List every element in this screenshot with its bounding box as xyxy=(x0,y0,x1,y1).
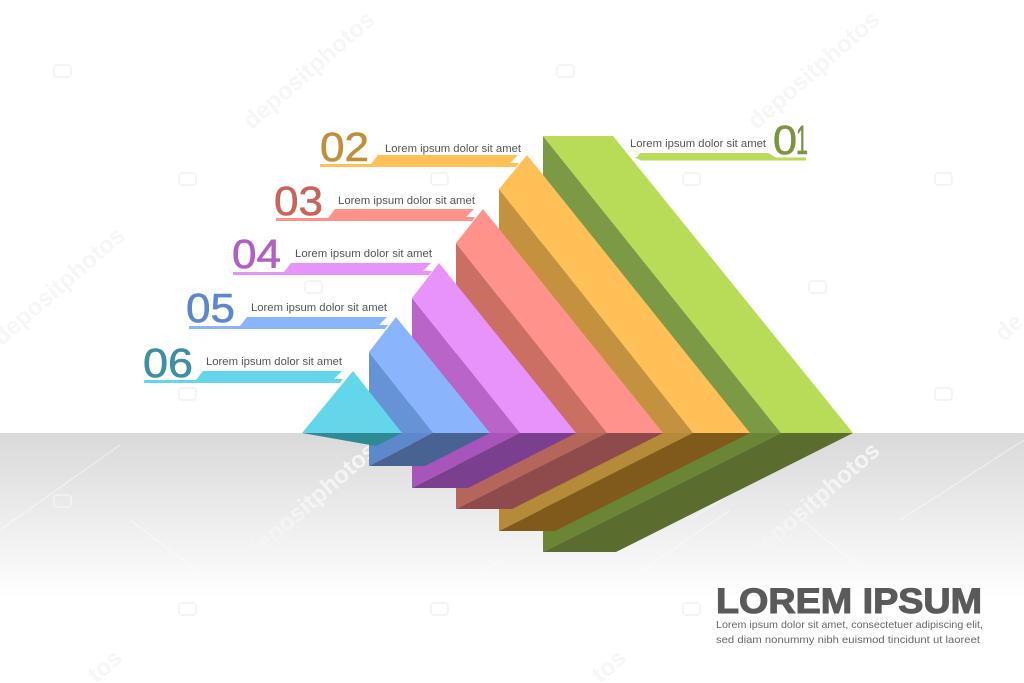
watermark text: depositphotos xyxy=(743,6,885,135)
label 01 text: Lorem ipsum dolor sit amet xyxy=(630,138,767,150)
label 06 bar xyxy=(144,371,343,383)
floor reflection: 02 orange xyxy=(499,433,750,531)
label 04 xyxy=(232,231,433,277)
label 04 text: Lorem ipsum dolor sit amet xyxy=(295,248,433,260)
floor reflection: 06 cyan xyxy=(302,433,402,446)
description: sed diam nonummy nibh euismod tincidunt ut laoreet xyxy=(716,634,980,646)
label 06 text: Lorem ipsum dolor sit amet xyxy=(206,356,343,368)
label 01 xyxy=(630,117,808,163)
label 02 xyxy=(320,124,522,170)
watermark text: depositphotos xyxy=(743,437,885,566)
title block xyxy=(716,582,983,646)
label 03 number: 03 xyxy=(274,178,323,224)
label 01 bar xyxy=(634,153,806,160)
description: Lorem ipsum dolor sit amet, consectetuer adipiscing elit, xyxy=(716,619,983,631)
prism layer 04 pink xyxy=(412,263,576,433)
watermark lines xyxy=(0,440,1024,640)
floor reflection: 05 blue xyxy=(369,433,490,466)
label 01 number: 1 xyxy=(796,117,808,163)
floor reflection: 03 red xyxy=(456,433,663,509)
title: LOREM IPSUM xyxy=(716,582,982,621)
prism layer 05 blue xyxy=(369,317,490,433)
prism layer 01 green xyxy=(543,136,853,433)
prism layer 03 red xyxy=(456,209,663,433)
label 01 number: 0 xyxy=(773,117,797,163)
label 03 text: Lorem ipsum dolor sit amet xyxy=(338,195,476,207)
label 05 xyxy=(186,285,388,331)
floor reflection: 04 pink xyxy=(412,433,576,488)
prism layer 02 orange xyxy=(499,155,750,433)
prism layer 06 cyan xyxy=(302,371,402,433)
label 03 bar xyxy=(276,209,475,221)
label 05 text: Lorem ipsum dolor sit amet xyxy=(251,302,388,314)
label 02 number: 02 xyxy=(320,124,369,170)
label 02 bar xyxy=(320,155,519,167)
label 04 bar xyxy=(233,263,432,275)
label 06 xyxy=(143,340,343,386)
watermark text: depositphotos xyxy=(240,437,382,566)
label 04 number: 04 xyxy=(232,231,281,277)
label 03 xyxy=(274,178,476,224)
watermark camera icons xyxy=(54,65,952,615)
description xyxy=(716,619,983,646)
label 06 number: 06 xyxy=(143,340,193,386)
label 02 text: Lorem ipsum dolor sit amet xyxy=(385,143,522,155)
label 05 number: 05 xyxy=(186,285,235,331)
floor reflection: 01 green xyxy=(543,433,853,552)
watermark text: depositphotos xyxy=(238,6,380,135)
label 05 bar xyxy=(189,317,388,329)
label 01 number xyxy=(773,117,808,163)
